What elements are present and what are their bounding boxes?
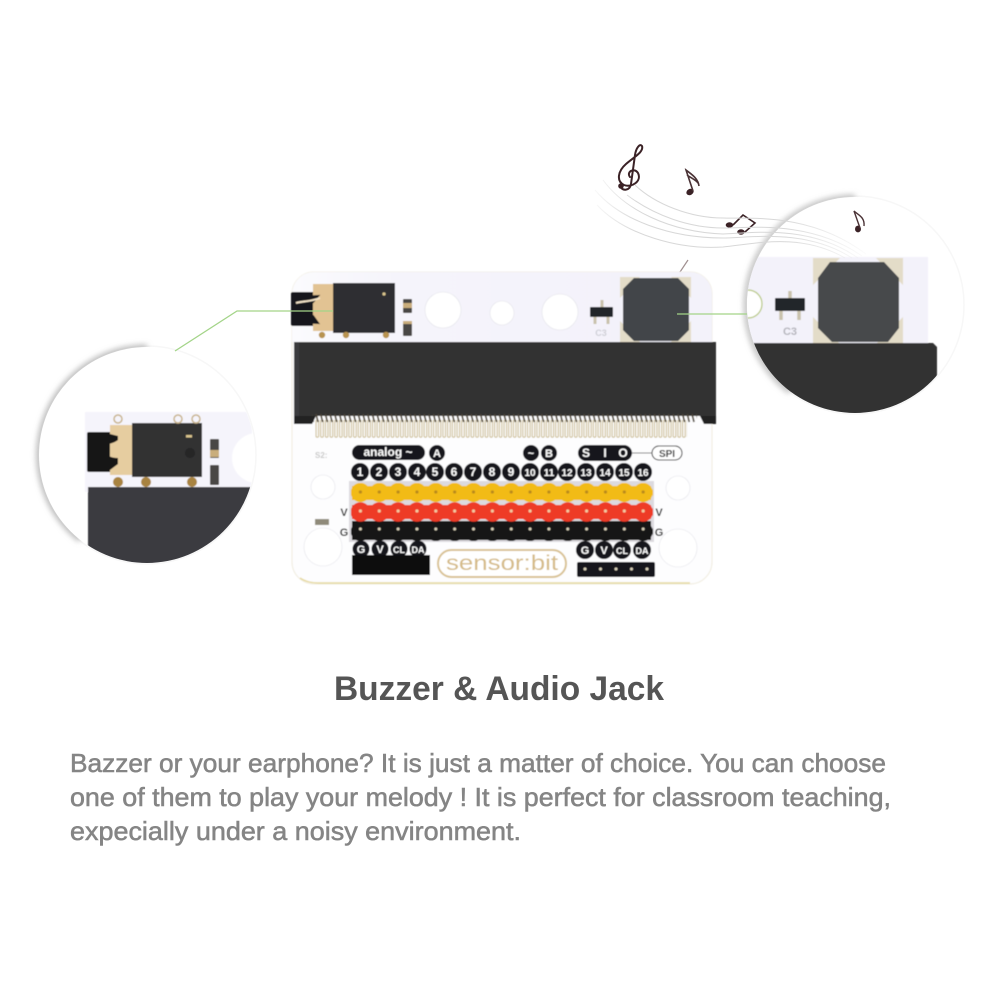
labels row: A bbox=[433, 448, 441, 460]
labels row: B bbox=[545, 448, 553, 460]
right connector header: G bbox=[581, 545, 589, 557]
mounting holes bbox=[304, 292, 697, 567]
right connector header: CL bbox=[616, 546, 628, 556]
right connector header: DA bbox=[636, 546, 649, 556]
pin number row: 1 bbox=[357, 465, 364, 479]
pin number row: 4 bbox=[414, 465, 421, 479]
buzzer bbox=[620, 277, 691, 342]
pin number row: 13 bbox=[580, 468, 592, 479]
pin number row: 5 bbox=[432, 465, 439, 479]
V and G labels: V bbox=[655, 507, 663, 519]
side marks bbox=[315, 451, 329, 525]
left connector header: G bbox=[357, 544, 365, 556]
pin number row: 8 bbox=[489, 465, 496, 479]
labels row bbox=[352, 445, 682, 461]
pin number row: 10 bbox=[524, 468, 536, 479]
right connector header bbox=[576, 541, 655, 577]
icon: treble clef bbox=[618, 145, 642, 190]
body text bbox=[70, 748, 891, 846]
pin number row: 9 bbox=[508, 465, 515, 479]
pin number row: 3 bbox=[395, 465, 402, 479]
panel: sensor:bit board bbox=[291, 272, 716, 584]
left connector header: DA bbox=[412, 545, 425, 555]
left connector header bbox=[352, 540, 430, 575]
labels row: SPI bbox=[659, 449, 675, 460]
body text: Bazzer or your earphone? It is just a matter of choice. You can choose bbox=[70, 748, 886, 778]
transistor: C3 bbox=[595, 328, 607, 338]
left connector header: V bbox=[376, 544, 384, 556]
icon: small note on buzzer bbox=[674, 260, 688, 278]
pin number row: 2 bbox=[376, 465, 383, 479]
callout line: audio jack bbox=[175, 311, 333, 351]
board detail bbox=[745, 257, 928, 345]
sensor:bit logo: sensor:bit bbox=[446, 552, 558, 575]
board body bbox=[292, 272, 712, 584]
icon: beamed notes bbox=[726, 215, 755, 235]
transistor detail: C3 bbox=[783, 326, 797, 338]
pin number row: 15 bbox=[618, 468, 630, 479]
labels row: analog ~ bbox=[363, 445, 413, 459]
board detail bbox=[85, 412, 252, 492]
pin number row: 11 bbox=[544, 468, 555, 479]
pin number row: 16 bbox=[637, 468, 649, 479]
pin number row bbox=[351, 463, 652, 481]
title: Buzzer & Audio Jack bbox=[334, 670, 664, 708]
labels row: ~ bbox=[528, 448, 535, 460]
sensor:bit logo bbox=[438, 550, 566, 577]
left connector header: CL bbox=[393, 545, 405, 555]
pin number row: 7 bbox=[470, 465, 477, 479]
transistor detail bbox=[775, 291, 805, 338]
panel: audio jack zoom circle bbox=[33, 342, 252, 563]
body text: expecially under a noisy environment. bbox=[70, 816, 521, 846]
connector detail bbox=[750, 343, 937, 418]
pin number row: 14 bbox=[599, 468, 611, 479]
V and G labels bbox=[340, 507, 663, 539]
resistors bbox=[403, 299, 412, 336]
V and G labels: G bbox=[655, 527, 663, 539]
labels row: S bbox=[582, 446, 590, 460]
labels row: O bbox=[618, 446, 628, 460]
body text: one of them to play your melody ! It is perfect for classroom teaching, bbox=[70, 782, 891, 812]
jack detail bbox=[87, 415, 202, 487]
V and G labels: V bbox=[340, 507, 348, 519]
V and G labels: G bbox=[340, 527, 348, 539]
callout line: buzzer bbox=[677, 313, 747, 315]
right connector header: V bbox=[600, 545, 608, 557]
resistor detail bbox=[210, 439, 219, 485]
panel: buzzer zoom circle bbox=[740, 192, 938, 413]
pin header rows bbox=[349, 481, 654, 542]
buzzer detail bbox=[813, 258, 903, 344]
labels row: I bbox=[603, 446, 607, 460]
pin number row: 12 bbox=[561, 468, 573, 479]
pin number row: 6 bbox=[451, 465, 458, 479]
transistor bbox=[590, 300, 613, 338]
edge connector bbox=[294, 342, 716, 439]
icon: note in zoom circle bbox=[854, 211, 864, 232]
audio jack bbox=[291, 283, 395, 338]
music staff lines bbox=[595, 180, 866, 258]
connector detail bbox=[88, 487, 258, 567]
icon: eighth note bbox=[685, 170, 699, 196]
side marks: S2: bbox=[315, 451, 327, 460]
